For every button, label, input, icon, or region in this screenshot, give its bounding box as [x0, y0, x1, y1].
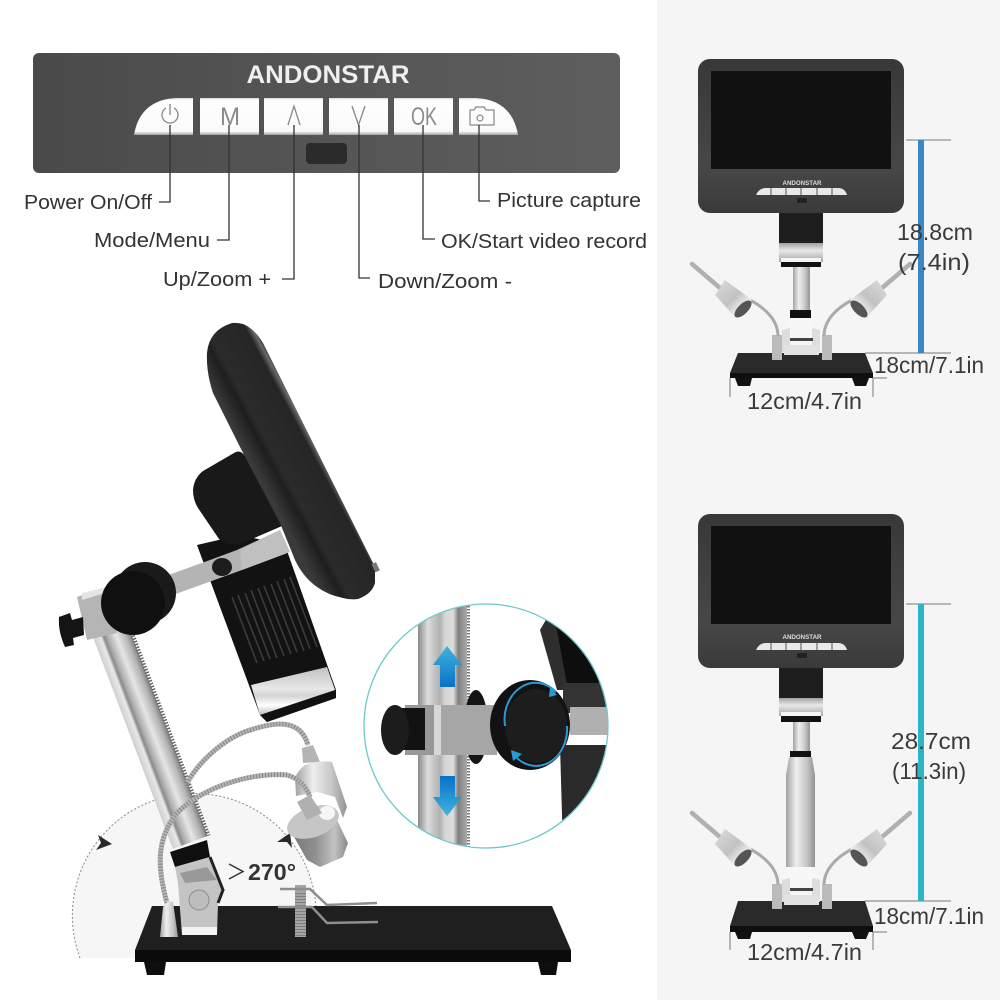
base: [730, 353, 873, 386]
ribbed grip: [232, 577, 317, 663]
column: [91, 619, 209, 849]
lamp post: [160, 901, 178, 937]
callout: up: [163, 125, 294, 291]
column collar: [170, 840, 210, 867]
width label: 12cm/4.7in: [747, 388, 862, 414]
column: [786, 722, 815, 867]
lower gooseneck: [160, 775, 310, 903]
arrow up: [433, 646, 462, 687]
callout: picture capture: Picture capture: [497, 190, 641, 212]
callout: down: [359, 125, 512, 293]
button: mode: M: [220, 103, 240, 131]
inset rack: [467, 600, 470, 850]
camera: [779, 665, 823, 722]
monitor: ANDONSTAR: [782, 180, 822, 187]
depth label: 18cm/7.1in: [874, 352, 984, 378]
button: ok: OK: [411, 103, 437, 131]
arrow down: [433, 776, 462, 816]
callout: power: [24, 125, 170, 214]
front view: short position: [692, 59, 984, 414]
inset big knob: [490, 680, 570, 770]
button: mode: [200, 98, 259, 135]
height label inches: (11.3in): [892, 758, 966, 784]
button: power: [134, 98, 193, 135]
column: [793, 265, 810, 312]
arm clamp: [59, 587, 117, 647]
bracket: [772, 867, 832, 909]
slide clip: [278, 885, 378, 937]
upper lamp: [295, 745, 347, 818]
hinge bracket: [175, 857, 223, 935]
upper gooseneck: [187, 724, 308, 783]
focus knob: [101, 562, 176, 635]
callout: ok: OK/Start video record: [441, 231, 647, 253]
monitor: [698, 59, 904, 213]
brand name: ANDONSTAR: [246, 61, 410, 89]
left lamp: [692, 813, 778, 885]
arc arrowheads: [96, 833, 292, 850]
front view: tall position: [692, 514, 984, 965]
right lamp: [824, 813, 910, 885]
callout: picture capture: [479, 125, 641, 212]
inset column: [418, 600, 467, 850]
inset clamp: [405, 705, 497, 755]
callout: ok: [423, 125, 647, 253]
height label inches: (7.4in): [898, 249, 970, 275]
side view microscope: [59, 323, 571, 975]
height bar: [730, 140, 951, 397]
inset gear: [466, 690, 486, 764]
callout: up: Up/Zoom +: [163, 269, 271, 291]
rotation range arc: [72, 794, 316, 958]
button: picture capture: [459, 98, 518, 135]
base: [730, 901, 873, 939]
left lamp: [692, 264, 778, 336]
silver lens ring: [251, 667, 335, 715]
height label: 18.8cm: [897, 219, 973, 245]
callout: mode: [94, 125, 229, 252]
inset small knob: [381, 705, 425, 755]
height bar: [730, 604, 951, 950]
right lamp: [824, 264, 910, 336]
inset camera: [540, 620, 608, 820]
collar: [790, 310, 811, 318]
bracket: [772, 318, 832, 360]
panel: device front strip: [33, 53, 620, 173]
rotation label: 270°: [248, 859, 296, 885]
monitor: ANDONSTAR: [782, 634, 822, 641]
callout: down: Down/Zoom -: [378, 271, 512, 293]
control panel diagram: [33, 53, 620, 173]
rear battery block: [193, 452, 282, 545]
callout: power: Power On/Off: [24, 192, 152, 214]
right background panel: [657, 0, 1000, 1000]
monitor side profile: [207, 323, 380, 599]
inset: focus knob detail: [364, 600, 620, 850]
height label: 28.7cm: [891, 728, 971, 754]
camera body: [197, 535, 336, 722]
callout: mode: Mode/Menu: [94, 230, 210, 252]
button: up: [264, 98, 323, 135]
lower lamp: [282, 795, 348, 867]
depth label: 18cm/7.1in: [874, 903, 984, 929]
width label: 12cm/4.7in: [747, 939, 862, 965]
monitor: [698, 514, 904, 668]
support arm: [163, 530, 290, 595]
camera: [779, 210, 823, 267]
sensor slot: [306, 143, 347, 164]
button: down: [329, 98, 388, 135]
button: ok: [394, 98, 453, 135]
base plate: [135, 906, 571, 975]
rotate arrows: [505, 683, 567, 766]
